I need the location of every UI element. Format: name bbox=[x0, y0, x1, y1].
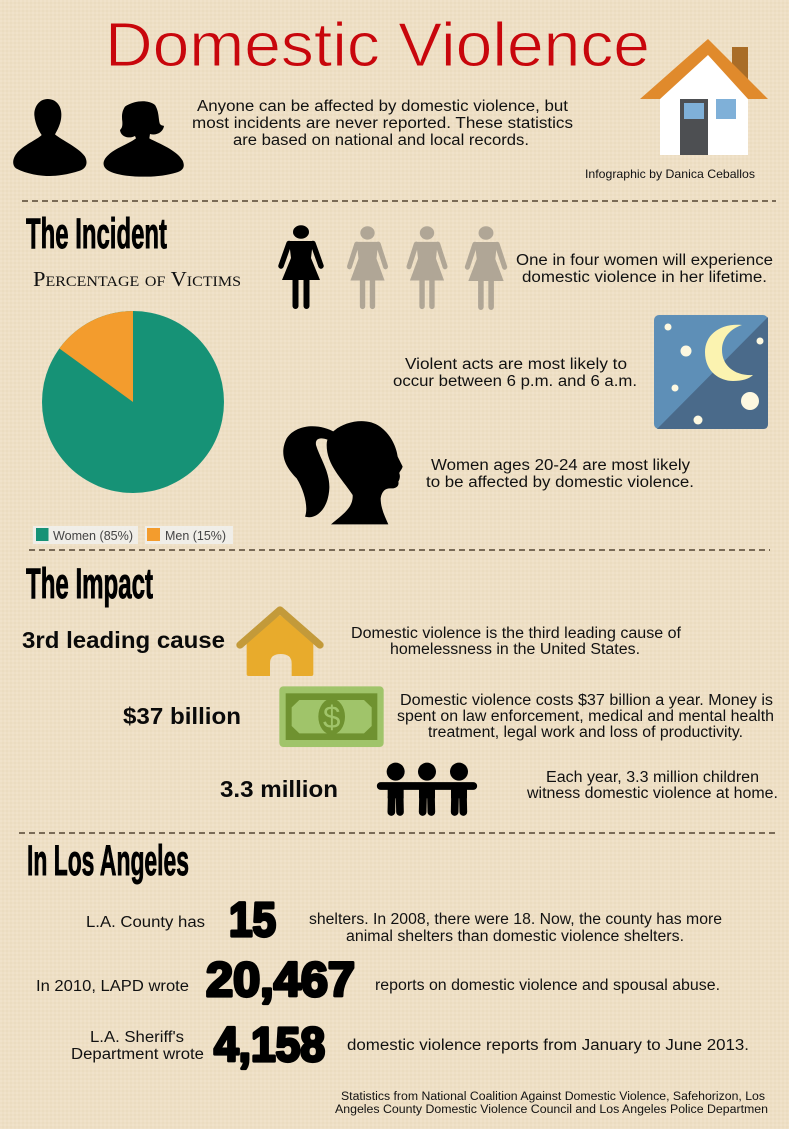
intro text: most incidents are never reported. These statistics bbox=[192, 115, 573, 132]
text: women ages: Women ages 20-24 are most likely bbox=[431, 457, 690, 474]
heading: the impact: The Impact bbox=[26, 560, 153, 608]
pie chart bbox=[42, 311, 224, 493]
icon: woman silhouette bbox=[104, 101, 184, 177]
intro text: Anyone can be affected by domestic violence, but bbox=[197, 98, 569, 115]
stat: 3.3 million: 3.3 million bbox=[220, 776, 338, 802]
text: sheriff reports: domestic violence reports from January to June 2013. bbox=[347, 1037, 749, 1054]
heading: the incident: The Incident bbox=[26, 210, 167, 258]
text: shelters bbox=[309, 911, 722, 945]
sources: Angeles County Domestic Violence Council and Los Angeles Police Departmen bbox=[335, 1104, 768, 1116]
text: cost: treatment, legal work and loss of productivity. bbox=[428, 724, 743, 741]
heading: in los angeles: In Los Angeles bbox=[27, 837, 189, 885]
text: one in four bbox=[516, 252, 773, 286]
intro text: are based on national and local records. bbox=[233, 132, 529, 149]
text: sheriff: Department wrote bbox=[71, 1046, 204, 1063]
icon: yellow house bbox=[240, 610, 320, 676]
text: one in four: One in four women will experience bbox=[516, 252, 773, 269]
icon: money bbox=[279, 686, 384, 747]
icon: night sky bbox=[654, 315, 768, 429]
pie legend bbox=[33, 526, 233, 544]
text: homelessness: homelessness in the United States. bbox=[390, 641, 640, 658]
text: children: Each year, 3.3 million children bbox=[546, 769, 759, 786]
number: 4,158: 4,158 bbox=[214, 1019, 325, 1072]
text: homelessness: Domestic violence is the third leading cause of bbox=[351, 625, 682, 642]
text: women ages: to be affected by domestic violence. bbox=[426, 474, 694, 491]
text: women ages bbox=[426, 457, 694, 491]
pie chart heading: Percentage of Victims bbox=[33, 267, 241, 291]
icon: money: $ bbox=[323, 700, 340, 735]
text: violent acts bbox=[393, 356, 637, 390]
sources: Statistics from National Coalition Against Domestic Violence, Safehorizon, Los bbox=[341, 1091, 765, 1103]
stat: $37 billion: $37 billion bbox=[123, 703, 241, 729]
text: violent acts: Violent acts are most likely to bbox=[405, 356, 627, 373]
text: lapd: In 2010, LAPD wrote bbox=[36, 978, 189, 995]
icon: ponytail profile bbox=[283, 421, 403, 524]
panel: the incident bbox=[26, 210, 773, 544]
text: children bbox=[526, 769, 778, 802]
credit: Infographic by Danica Ceballos bbox=[585, 167, 755, 181]
icon: house bbox=[640, 39, 768, 155]
text: sheriff bbox=[71, 1029, 204, 1063]
intro text bbox=[192, 98, 573, 149]
text: children: witness domestic violence at home. bbox=[526, 785, 778, 802]
text: lapd reports: reports on domestic violence and spousal abuse. bbox=[375, 977, 720, 994]
pie legend: Men (15%) bbox=[165, 528, 226, 543]
number: 15: 15 bbox=[229, 894, 276, 947]
text: sheriff: L.A. Sheriff's bbox=[90, 1029, 184, 1046]
text: shelters: animal shelters than domestic violence shelters. bbox=[346, 928, 684, 945]
stat: 3rd leading cause: 3rd leading cause bbox=[22, 627, 225, 653]
pie legend: Women (85%) bbox=[53, 528, 133, 543]
text: homelessness bbox=[351, 625, 682, 658]
text: cost: Domestic violence costs $37 billion a year. Money is bbox=[400, 692, 773, 709]
icon: four women pictogram bbox=[281, 225, 505, 307]
text: one in four: domestic violence in her lifetime. bbox=[522, 269, 767, 286]
number: 20,467: 20,467 bbox=[206, 954, 355, 1007]
text: violent acts: occur between 6 p.m. and 6 a.m. bbox=[393, 373, 637, 390]
panel: the impact bbox=[22, 560, 778, 812]
icon: three children bbox=[381, 763, 473, 812]
sources bbox=[335, 1091, 768, 1116]
panel: header bbox=[13, 11, 768, 181]
text: cost: spent on law enforcement, medical and mental health bbox=[397, 708, 774, 725]
text: la county: L.A. County has bbox=[86, 914, 205, 931]
icon: man silhouette bbox=[13, 99, 87, 176]
text: cost bbox=[397, 692, 774, 741]
title: Domestic Violence bbox=[105, 11, 650, 80]
panel: in los angeles bbox=[27, 837, 768, 1116]
text: shelters: shelters. In 2008, there were 18. Now, the county has more bbox=[309, 911, 722, 928]
